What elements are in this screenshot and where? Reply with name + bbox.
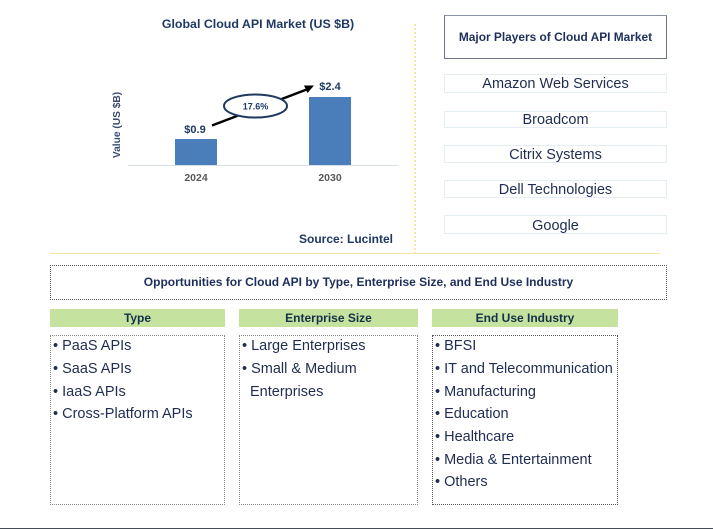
list: end use industry: • BFSI: [435, 338, 476, 354]
player: Broadcom: Broadcom: [522, 112, 589, 128]
column header: type: [50, 309, 225, 327]
column header: end use industry: [432, 309, 618, 327]
column header: enterprise size: Enterprise Size: [285, 311, 372, 325]
chart title: Global Cloud API Market (US $B): [162, 17, 354, 31]
list: end use industry: • IT and Telecommunication: [435, 360, 613, 376]
heading: major players: Major Players of Cloud API Market: [459, 30, 652, 44]
player: Amazon Web Services: [444, 74, 667, 93]
player: Dell Technologies: Dell Technologies: [499, 182, 612, 198]
baseline: [128, 164, 398, 166]
list: type: [50, 335, 225, 505]
vertical divider: [414, 24, 416, 254]
list: enterprise size: [239, 335, 418, 505]
bottom rule: [0, 528, 713, 529]
list: type: • PaaS APIs: [53, 338, 131, 354]
player: Amazon Web Services: Amazon Web Services: [482, 76, 629, 92]
bar chart: global cloud API market: [112, 17, 398, 246]
heading: major players: [444, 15, 667, 59]
list: type: • SaaS APIs: [53, 360, 131, 376]
list: end use industry: [432, 335, 618, 505]
column header: end use industry: End Use Industry: [476, 311, 574, 325]
list: end use industry: • Healthcare: [435, 428, 514, 444]
value label: 2030: $2.4: [319, 81, 342, 93]
arrow: growth: [212, 86, 314, 126]
player: Citrix Systems: Citrix Systems: [509, 147, 602, 163]
column header: type: Type: [124, 311, 151, 325]
player: Google: Google: [532, 218, 579, 234]
list: enterprise size: • Large Enterprises: [242, 338, 366, 354]
list: type: • IaaS APIs: [53, 384, 126, 400]
y axis label: Value (US $B): [112, 92, 123, 158]
callout: CAGR ellipse: [224, 94, 287, 118]
player: Google: [444, 215, 667, 234]
source note: Source: Lucintel: [299, 232, 393, 246]
list: end use industry: • Manufacturing: [435, 384, 536, 400]
list: end use industry: • Others: [435, 474, 488, 490]
callout: CAGR ellipse: 17.6%: [243, 102, 268, 112]
list: type: • Cross-Platform APIs: [53, 406, 193, 422]
heading: opportunities: Opportunities for Cloud API by Type, Enterprise Size, and End Use Industry: [144, 275, 573, 289]
list: end use industry: • Education: [435, 406, 509, 422]
list: enterprise size: • Small & Medium: [242, 360, 357, 376]
horizontal divider: [50, 253, 660, 254]
bar: 2024: [175, 139, 217, 165]
player: Citrix Systems: [444, 145, 667, 163]
category label: 2024: 2024: [184, 172, 208, 184]
column header: enterprise size: [239, 309, 418, 327]
heading: opportunities: [50, 265, 667, 300]
list: end use industry: • Media & Entertainment: [435, 452, 592, 468]
player: Broadcom: [444, 111, 667, 128]
category label: 2030: 2030: [318, 172, 342, 184]
list: enterprise size: Enterprises: [250, 384, 323, 400]
player: Dell Technologies: [444, 180, 667, 198]
value label: 2024: $0.9: [184, 124, 206, 136]
bar: 2030: [309, 97, 351, 165]
